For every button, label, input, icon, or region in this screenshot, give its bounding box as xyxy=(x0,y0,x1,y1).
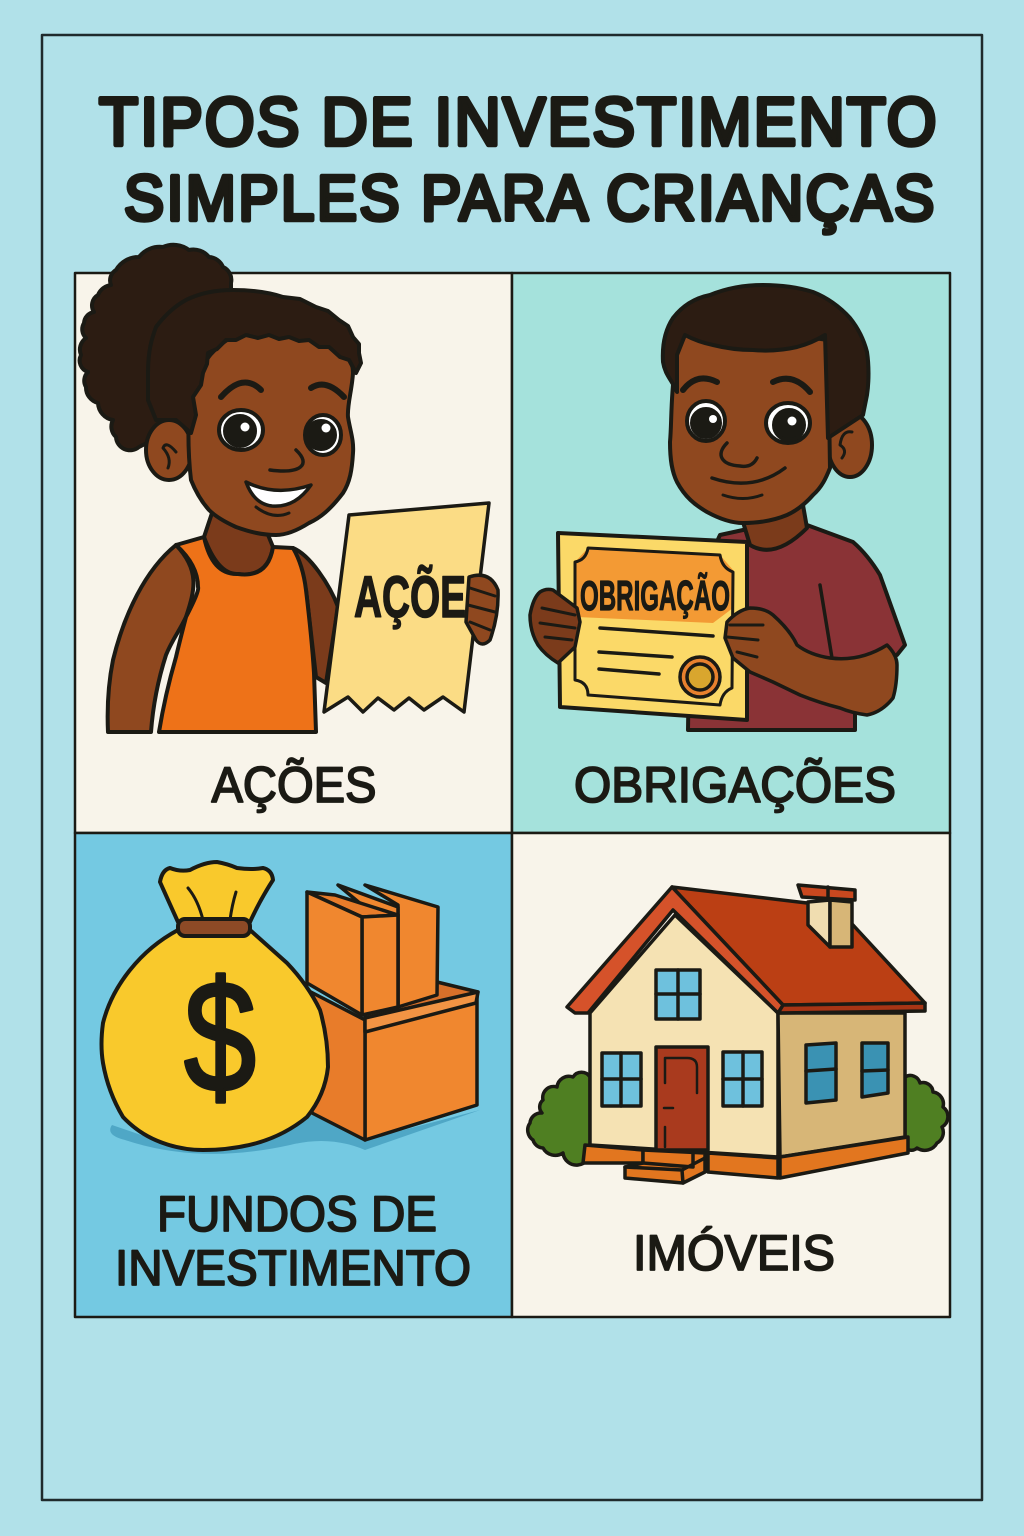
title: SIMPLES PARA CRIANÇAS xyxy=(124,163,934,234)
icon: house xyxy=(528,885,948,1183)
icon: boxes and folders xyxy=(307,885,478,1140)
icon: share paper xyxy=(324,503,489,712)
icon: left hand xyxy=(530,589,580,663)
panel: obrigações xyxy=(512,273,950,833)
label: fundos de investimento: FUNDOS DE xyxy=(157,1186,437,1242)
title: TIPOS DE INVESTIMENTO xyxy=(99,83,937,159)
icon: money bag xyxy=(102,862,328,1150)
label: obrigações: OBRIGAÇÕES xyxy=(574,757,896,813)
icon: girl with share certificate xyxy=(80,245,498,732)
icon: hand xyxy=(466,575,498,644)
icon: bond certificate xyxy=(558,533,747,720)
icon: right arm and hand xyxy=(725,608,897,715)
label: ações: AÇÕES xyxy=(212,757,376,813)
panel: ações xyxy=(75,245,512,833)
panel: imóveis xyxy=(512,833,950,1317)
icon: right bush xyxy=(905,1075,948,1150)
panel: fundos de investimento xyxy=(75,833,512,1317)
icon: left bush xyxy=(528,1072,590,1165)
title xyxy=(99,83,937,234)
icon: door xyxy=(656,1047,708,1150)
icon: share paper: AÇÕE xyxy=(354,565,466,630)
label: imóveis: IMÓVEIS xyxy=(633,1225,835,1281)
icon: shadow xyxy=(110,1110,480,1154)
icon: boy with bond certificate xyxy=(530,285,905,730)
label: fundos de investimento: INVESTIMENTO xyxy=(115,1240,471,1296)
icon: steps xyxy=(625,1150,705,1183)
icon: money bag: $ xyxy=(184,949,256,1125)
icon: bond certificate: OBRIGAÇÃO xyxy=(580,572,730,619)
label: fundos de investimento xyxy=(115,1186,471,1296)
